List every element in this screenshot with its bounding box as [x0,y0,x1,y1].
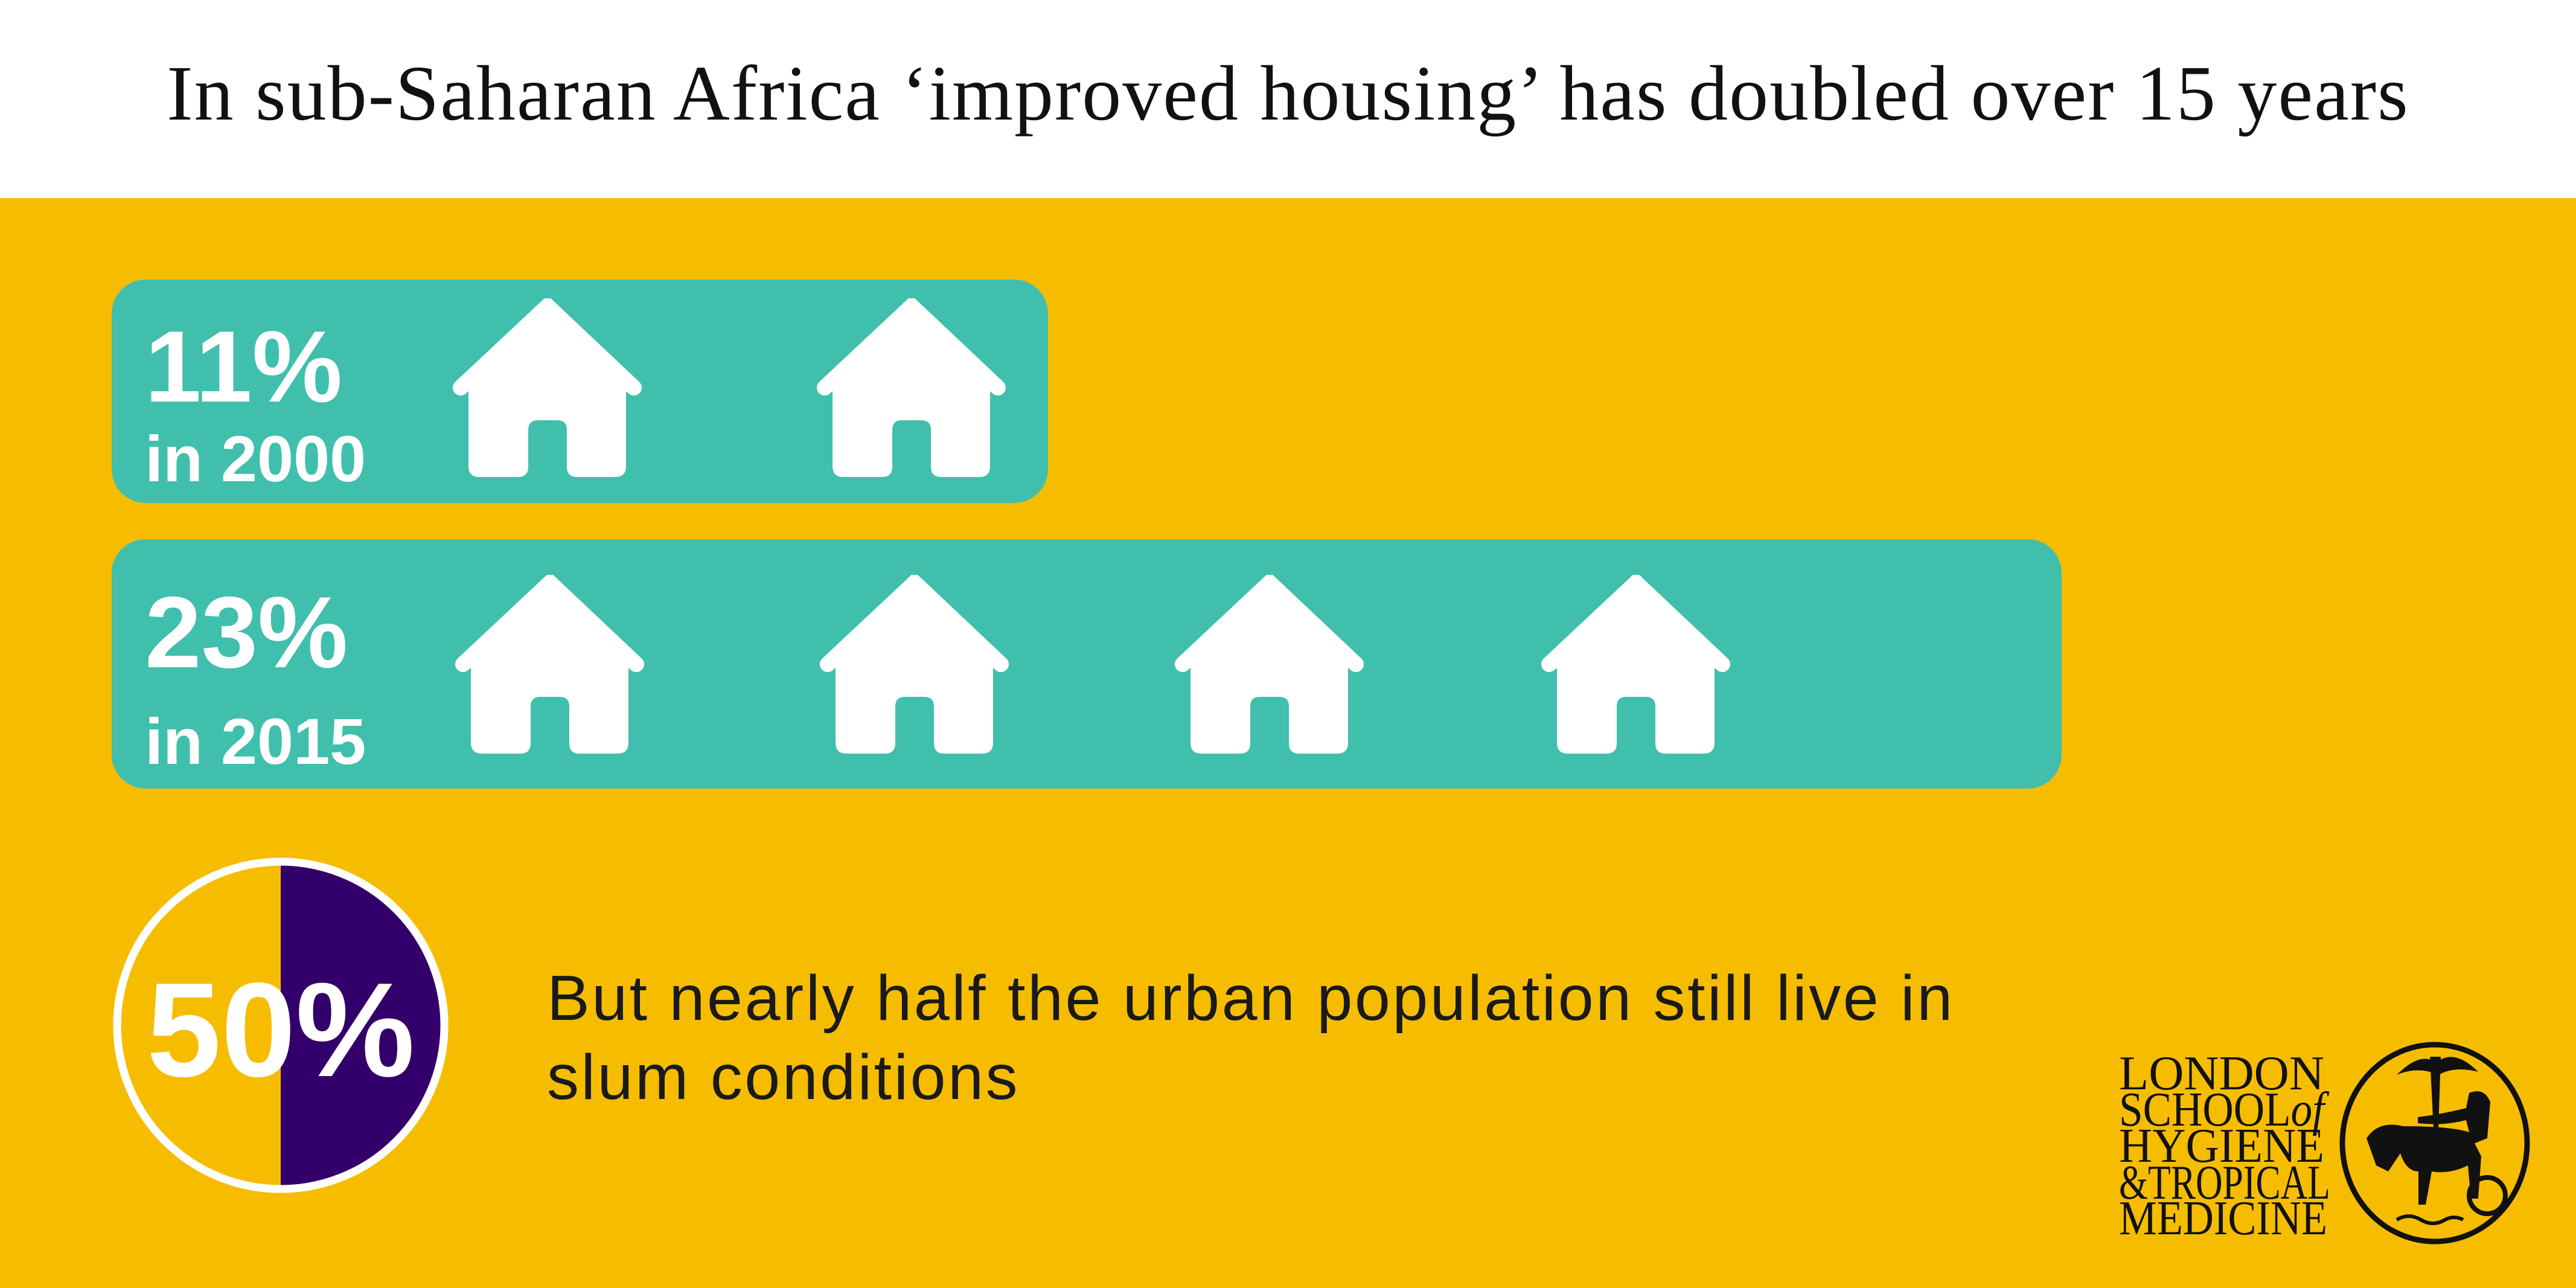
label in 2015: in 2015 [145,705,366,778]
label in 2000: in 2000 [145,422,366,495]
logo: LSHTM: HYGIENE [2119,1120,2324,1173]
text: slum conditions: But nearly half the urban population still live in [547,963,1955,1034]
text: slum conditions: slum conditions [547,1042,1020,1113]
stat 11%: 11% [145,310,342,423]
panel: 2015 bar [112,539,2062,789]
half circle chart 50% [113,857,448,1193]
logo: LSHTM [2119,1042,2530,1245]
title: In sub-Saharan Africa ‘improved housing’ has doubled over 15 years [167,50,2409,137]
icon: house 4 [1541,575,1730,754]
stat 23%: 23% [145,575,348,689]
logo: LSHTM: &TROPICAL [2119,1156,2330,1210]
icon: house 1 [453,298,642,477]
icon: house 1 [455,575,644,754]
logo: LSHTM: LONDON [2119,1047,2324,1100]
title band [0,0,2576,198]
half circle chart 50%: 50% [147,955,415,1105]
icon: house 2 [817,298,1006,477]
logo: LSHTM: MEDICINE [2119,1192,2327,1245]
text: slum conditions [547,963,1955,1113]
logo: LSHTM: SCHOOLof [2119,1083,2330,1136]
panel: 2000 bar [112,280,1048,503]
icon: house 2 [820,575,1009,754]
icon: house 3 [1175,575,1364,754]
